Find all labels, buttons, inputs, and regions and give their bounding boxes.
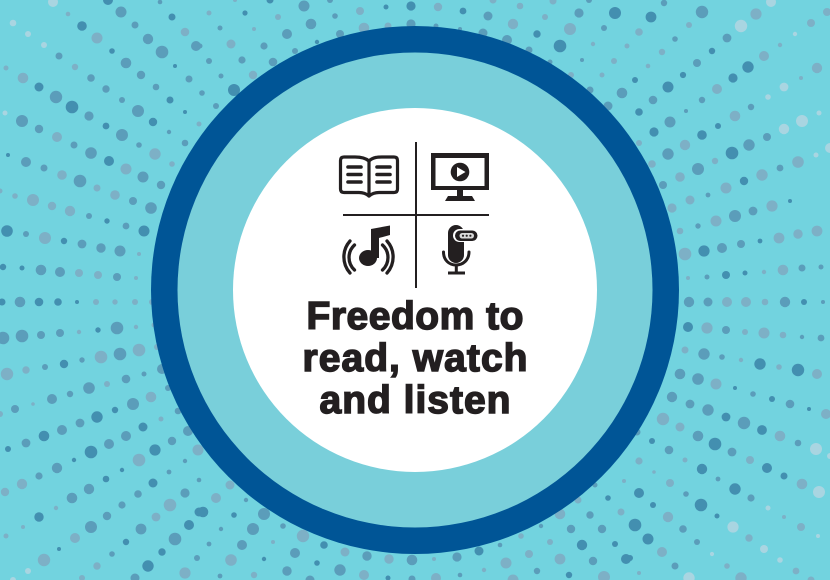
icon: open book (340, 157, 398, 196)
title: and listen (320, 379, 510, 422)
icon: video monitor (431, 153, 489, 201)
icon grid dividers (343, 142, 489, 288)
icon: music note with sound waves (344, 226, 393, 273)
title: read, watch (302, 337, 528, 380)
badge: concentric circles (151, 26, 679, 554)
title (302, 295, 528, 422)
icon: microphone with speech bubble (444, 225, 478, 274)
title: Freedom to (306, 295, 524, 338)
